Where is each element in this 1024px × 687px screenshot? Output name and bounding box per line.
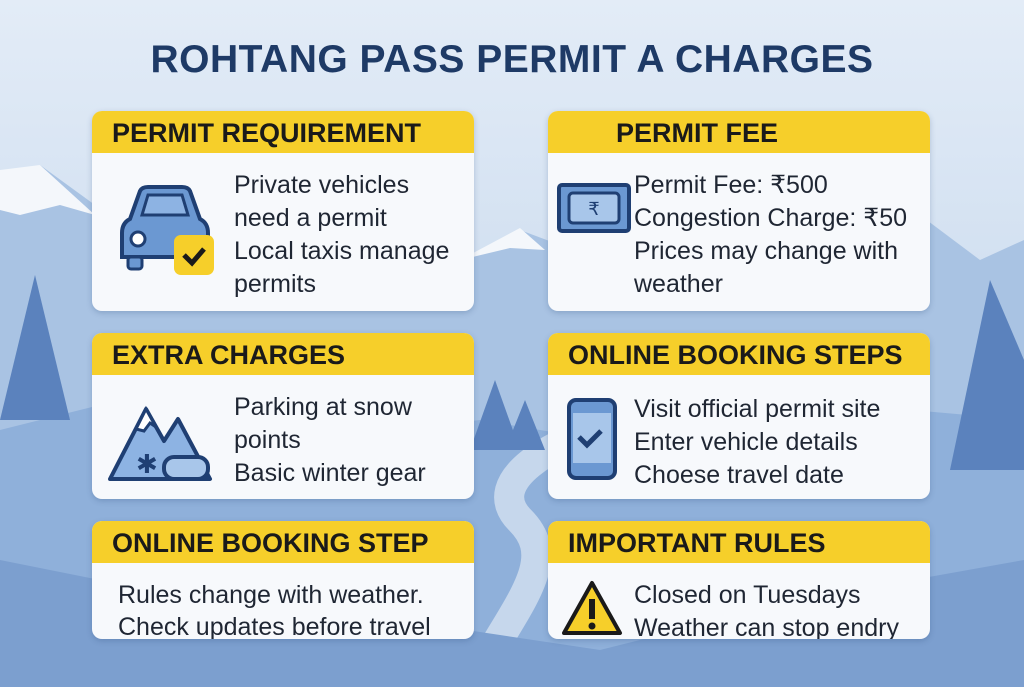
panel: extra charges	[92, 333, 474, 499]
panel: extra charges: points	[234, 426, 301, 454]
panel: important rules: IMPORTANT RULES	[568, 528, 826, 558]
panel: online booking step: Rules change with weather.	[118, 581, 424, 609]
panel: permit requirement: need a permit	[234, 204, 387, 232]
panel: permit fee: PERMIT FEE	[616, 118, 778, 148]
icon: rupee note	[557, 183, 631, 233]
panel: important rules	[548, 521, 930, 639]
panel: permit requirement	[92, 111, 474, 311]
panel: online booking step: ONLINE BOOKING STEP	[112, 528, 429, 558]
panel: online booking steps: Choese travel date	[634, 461, 844, 489]
panel: online booking steps: Visit official permit site	[634, 395, 880, 423]
panel: permit fee: Prices may change with	[634, 237, 898, 265]
panel: permit requirement: Private vehicles	[234, 171, 409, 199]
icon: mountains and goggles: ✱	[136, 449, 158, 479]
panel: important rules: Closed on Tuesdays	[634, 581, 861, 609]
panel: extra charges: Parking at snow	[234, 393, 412, 421]
panel: permit fee: Congestion Charge: ₹50	[634, 204, 907, 232]
panel: extra charges: Basic winter gear	[234, 459, 426, 487]
panel: permit requirement: PERMIT REQUIREMENT	[112, 118, 421, 148]
panel: online booking step	[92, 521, 474, 639]
icon: rupee note: ₹	[588, 199, 600, 220]
icon: warning	[562, 580, 622, 635]
icon: mountains and goggles	[108, 406, 212, 481]
panel: permit requirement: permits	[234, 270, 316, 298]
icon: phone with check	[567, 398, 617, 480]
panel: online booking steps: ONLINE BOOKING STEPS	[568, 340, 903, 370]
panel: permit fee: weather	[634, 270, 723, 298]
panel: permit fee	[548, 111, 930, 311]
icon: car with check	[120, 185, 214, 275]
panel: permit fee: Permit Fee: ₹500	[634, 171, 828, 199]
panel: extra charges: EXTRA CHARGES	[112, 340, 345, 370]
panel: permit requirement: Local taxis manage	[234, 237, 449, 265]
panel: online booking steps	[548, 333, 930, 499]
panel: online booking steps: Enter vehicle details	[634, 428, 858, 456]
title: ROHTANG PASS PERMIT A CHARGES	[150, 38, 874, 81]
